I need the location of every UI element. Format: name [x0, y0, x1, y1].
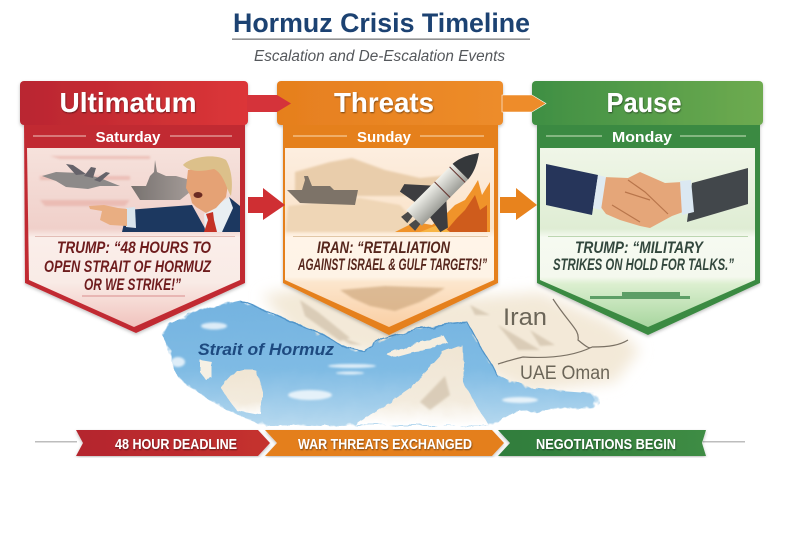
tie — [204, 212, 217, 232]
segment: negotiations begin — [498, 430, 706, 456]
warship — [131, 160, 190, 200]
right cuff — [680, 180, 694, 215]
header band — [532, 81, 763, 125]
right sleeve — [687, 168, 748, 222]
header band — [20, 81, 248, 125]
nozzles — [401, 211, 421, 231]
arrow: header red — [247, 95, 291, 112]
illustration and caption panel — [27, 148, 240, 327]
day label: Sunday — [357, 129, 412, 146]
caption divider — [293, 236, 488, 237]
land haze — [262, 283, 640, 392]
fins — [66, 164, 110, 182]
title: Hormuz Crisis Timeline — [233, 8, 530, 38]
arrow: orange middle — [500, 188, 537, 220]
title block — [232, 8, 530, 65]
orange ribbon — [265, 430, 504, 456]
green ribbon — [498, 430, 706, 456]
line 2: AGAINST ISRAEL & GULF TARGETS!” — [297, 255, 487, 274]
pointing hand — [89, 205, 127, 226]
arrow: red middle — [248, 188, 285, 220]
cuff — [126, 207, 136, 228]
caption divider — [35, 236, 235, 237]
land on water — [200, 335, 488, 425]
coast line — [240, 301, 497, 376]
right tail — [703, 441, 745, 442]
label: 48 HOUR DEADLINE — [115, 436, 237, 453]
heading: Threats — [334, 87, 434, 118]
fuselage — [42, 172, 120, 189]
suit — [122, 197, 240, 232]
water highlights — [171, 322, 538, 403]
day label: Monday — [612, 129, 673, 146]
accent stroke — [82, 295, 185, 297]
illustration: jet, warship, Trump — [40, 156, 240, 232]
label: WAR THREATS EXCHANGED — [298, 436, 472, 453]
illustration: warship, missile, fire — [286, 153, 490, 233]
illustration: handshake — [546, 164, 748, 228]
flames — [395, 180, 490, 232]
day rules — [33, 135, 232, 137]
label: Iran: Iran — [503, 304, 547, 331]
panel: Threats — [277, 81, 503, 335]
label: NEGOTIATIONS BEGIN — [536, 436, 676, 453]
caption divider — [548, 236, 748, 237]
label: UAE Oman: UAE Oman — [520, 363, 610, 384]
hands — [600, 172, 683, 228]
label: Strait of Hormuz: Strait of Hormuz — [198, 340, 335, 359]
map: Strait of Hormuz — [160, 283, 640, 426]
town sketch — [590, 292, 690, 299]
mouth — [194, 192, 202, 198]
haze — [40, 156, 150, 206]
illustration and caption panel — [285, 148, 494, 327]
red ribbon — [76, 430, 270, 456]
day rules — [546, 135, 746, 137]
header band — [277, 81, 503, 125]
card body — [24, 120, 245, 333]
left tail — [35, 441, 77, 442]
fins — [400, 184, 448, 232]
panel: Ultimatum — [20, 81, 248, 333]
illustration and caption panel — [540, 148, 755, 327]
quote text — [44, 238, 211, 294]
southwest land — [220, 370, 262, 415]
town sketch — [340, 286, 445, 311]
small island — [200, 360, 212, 380]
hills — [295, 158, 450, 196]
warship — [287, 176, 358, 205]
line 2: OPEN STRAIT OF HORMUZ — [44, 257, 211, 276]
terrain shading — [300, 300, 555, 410]
line 3: OR WE STRIKE!” — [84, 275, 181, 294]
face — [186, 169, 228, 213]
line 1: TRUMP: “48 HOURS TO — [57, 238, 211, 257]
segment: 48 hour deadline — [76, 430, 270, 456]
quote text — [553, 238, 734, 274]
card body — [537, 120, 760, 335]
left sleeve — [546, 164, 598, 215]
heading: Pause — [606, 87, 682, 118]
subtitle: Escalation and De-Escalation Events — [254, 48, 505, 65]
title rule — [232, 38, 530, 40]
timeline ribbon — [35, 430, 745, 456]
body — [406, 164, 468, 226]
finger lines — [612, 180, 668, 222]
peninsula — [355, 345, 488, 425]
card body — [283, 120, 498, 335]
segment: war threats exchanged — [265, 430, 504, 456]
left cuff — [593, 175, 606, 210]
panel: Pause — [532, 81, 763, 335]
Iran border line — [498, 299, 628, 364]
stripes — [435, 167, 465, 197]
line 1: IRAN: “RETALIATION — [317, 238, 451, 257]
quote text — [297, 238, 487, 274]
jet — [42, 164, 120, 189]
day rules — [293, 135, 484, 137]
day label: Saturday — [96, 129, 161, 146]
hair — [183, 156, 232, 196]
water — [160, 300, 600, 426]
island — [387, 335, 447, 358]
shirt — [204, 197, 233, 232]
nose cone — [452, 153, 479, 180]
line 1: TRUMP: “MILITARY — [575, 238, 704, 257]
arrow: header orange — [502, 95, 546, 112]
missile — [400, 153, 479, 232]
heading: Ultimatum — [60, 87, 196, 118]
